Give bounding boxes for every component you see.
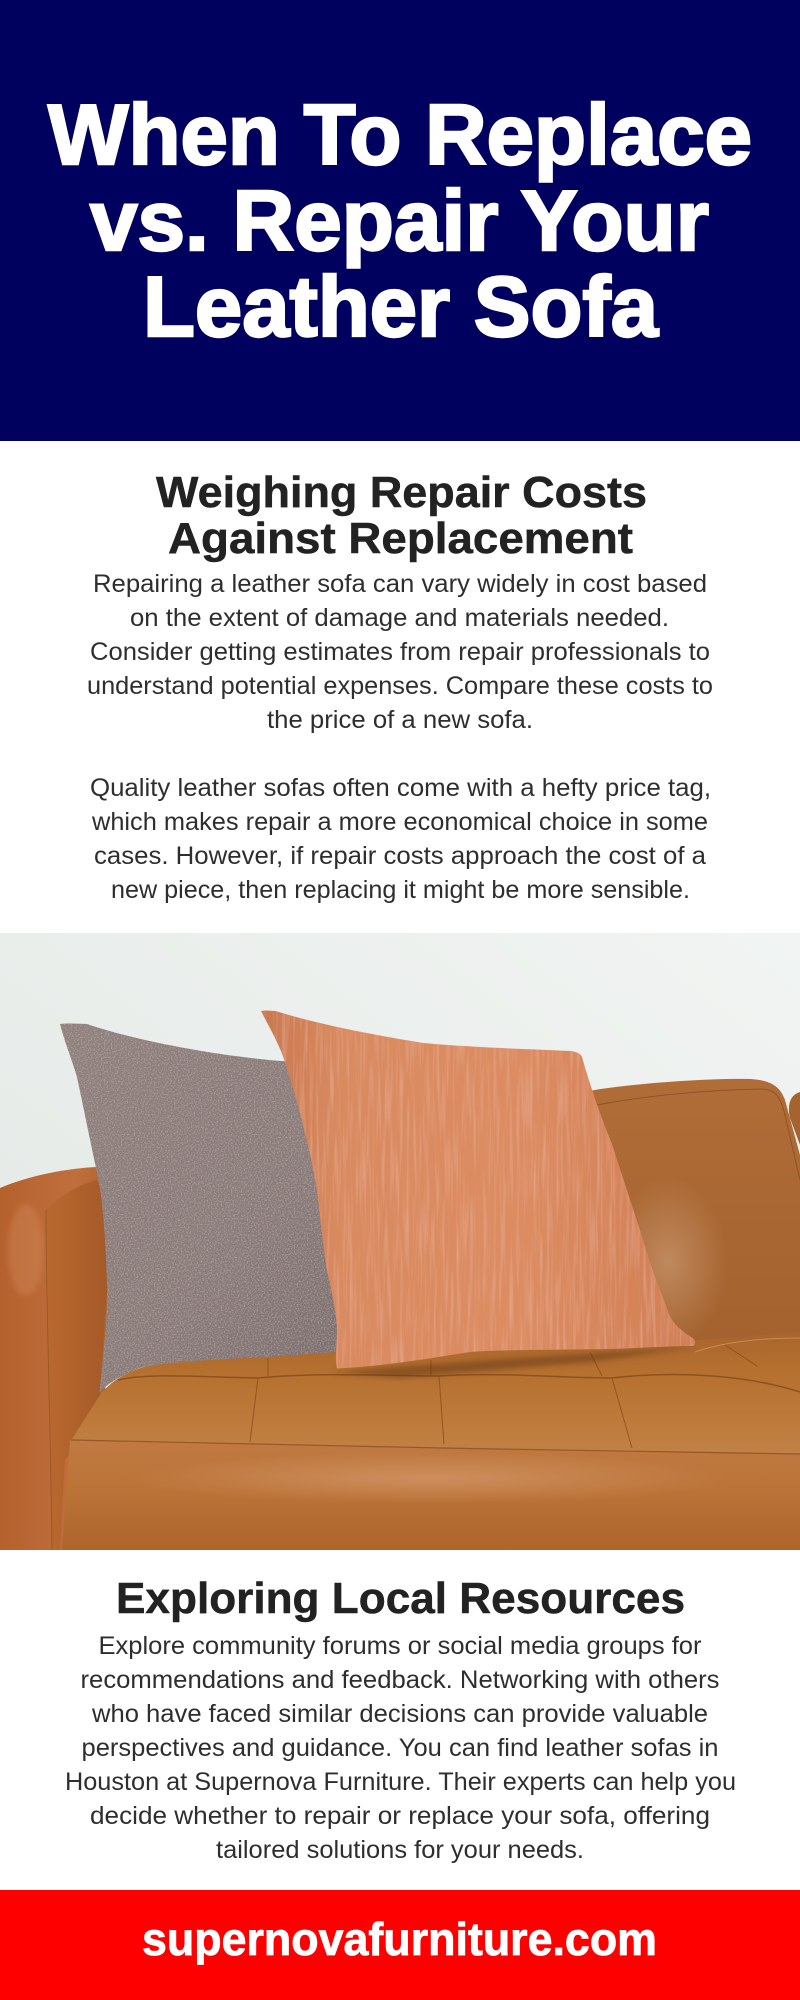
text block: local resources paragraph: perspectives and guidance. You can find leather sofas in xyxy=(82,1734,718,1762)
text block: quality sofas paragraph: Quality leather sofas often come with a hefty price tag, xyxy=(90,774,711,802)
title: When To Replace xyxy=(48,88,752,183)
text block: quality sofas paragraph xyxy=(90,774,711,904)
text block: local resources paragraph: recommendations and feedback. Networking with others xyxy=(80,1666,720,1694)
panel: title banner xyxy=(0,0,800,441)
text block: repair cost paragraph xyxy=(87,570,713,734)
heading: weighing repair costs xyxy=(156,468,647,563)
title: vs. Repair Your xyxy=(90,174,709,269)
heading: exploring local resources: Exploring Local Resources xyxy=(116,1574,685,1623)
text block: local resources paragraph: Explore community forums or social media groups for xyxy=(98,1632,702,1660)
pillow shadow xyxy=(330,1346,700,1378)
sofa arm xyxy=(0,1167,108,1550)
text block: repair cost paragraph: on the extent of damage and materials needed. xyxy=(130,604,669,632)
text block: local resources paragraph xyxy=(65,1632,736,1864)
back cushion xyxy=(589,1079,800,1347)
photo: leather sofa with pillows xyxy=(0,933,800,1550)
text block: local resources paragraph: Houston at Supernova Furniture. Their experts can help you xyxy=(65,1768,736,1796)
seat cushion xyxy=(70,1332,800,1460)
title: Leather Sofa xyxy=(143,260,659,355)
text block: quality sofas paragraph: which makes repair a more economical choice in some xyxy=(91,808,708,836)
orange pillow xyxy=(261,1011,695,1368)
text block: local resources paragraph: who have faced similar decisions can provide valuable xyxy=(91,1700,708,1728)
text block: repair cost paragraph: Repairing a leather sofa can vary widely in cost based xyxy=(93,570,707,598)
title xyxy=(48,88,752,355)
text block: repair cost paragraph: the price of a new sofa. xyxy=(267,706,533,734)
seat front xyxy=(62,1440,800,1550)
panel: exploring local resources xyxy=(0,1550,800,1890)
text block: local resources paragraph: tailored solutions for your needs. xyxy=(216,1836,584,1864)
footer url: supernovafurniture.com xyxy=(142,1913,657,1965)
panel: weighing repair costs xyxy=(0,441,800,933)
heading: weighing repair costs: Against Replacement xyxy=(168,514,633,563)
text block: repair cost paragraph: understand potential expenses. Compare these costs to xyxy=(87,672,713,700)
text block: local resources paragraph: decide whether to repair or replace your sofa, offering xyxy=(90,1802,710,1830)
gray pillow xyxy=(60,1024,380,1392)
text block: quality sofas paragraph: new piece, then replacing it might be more sensible. xyxy=(111,876,690,904)
text block: quality sofas paragraph: cases. However, if repair costs approach the cost of a xyxy=(94,842,706,870)
heading: weighing repair costs: Weighing Repair Costs xyxy=(156,468,647,517)
text block: repair cost paragraph: Consider getting estimates from repair professionals to xyxy=(90,638,710,666)
panel: footer website banner xyxy=(0,1890,800,2000)
